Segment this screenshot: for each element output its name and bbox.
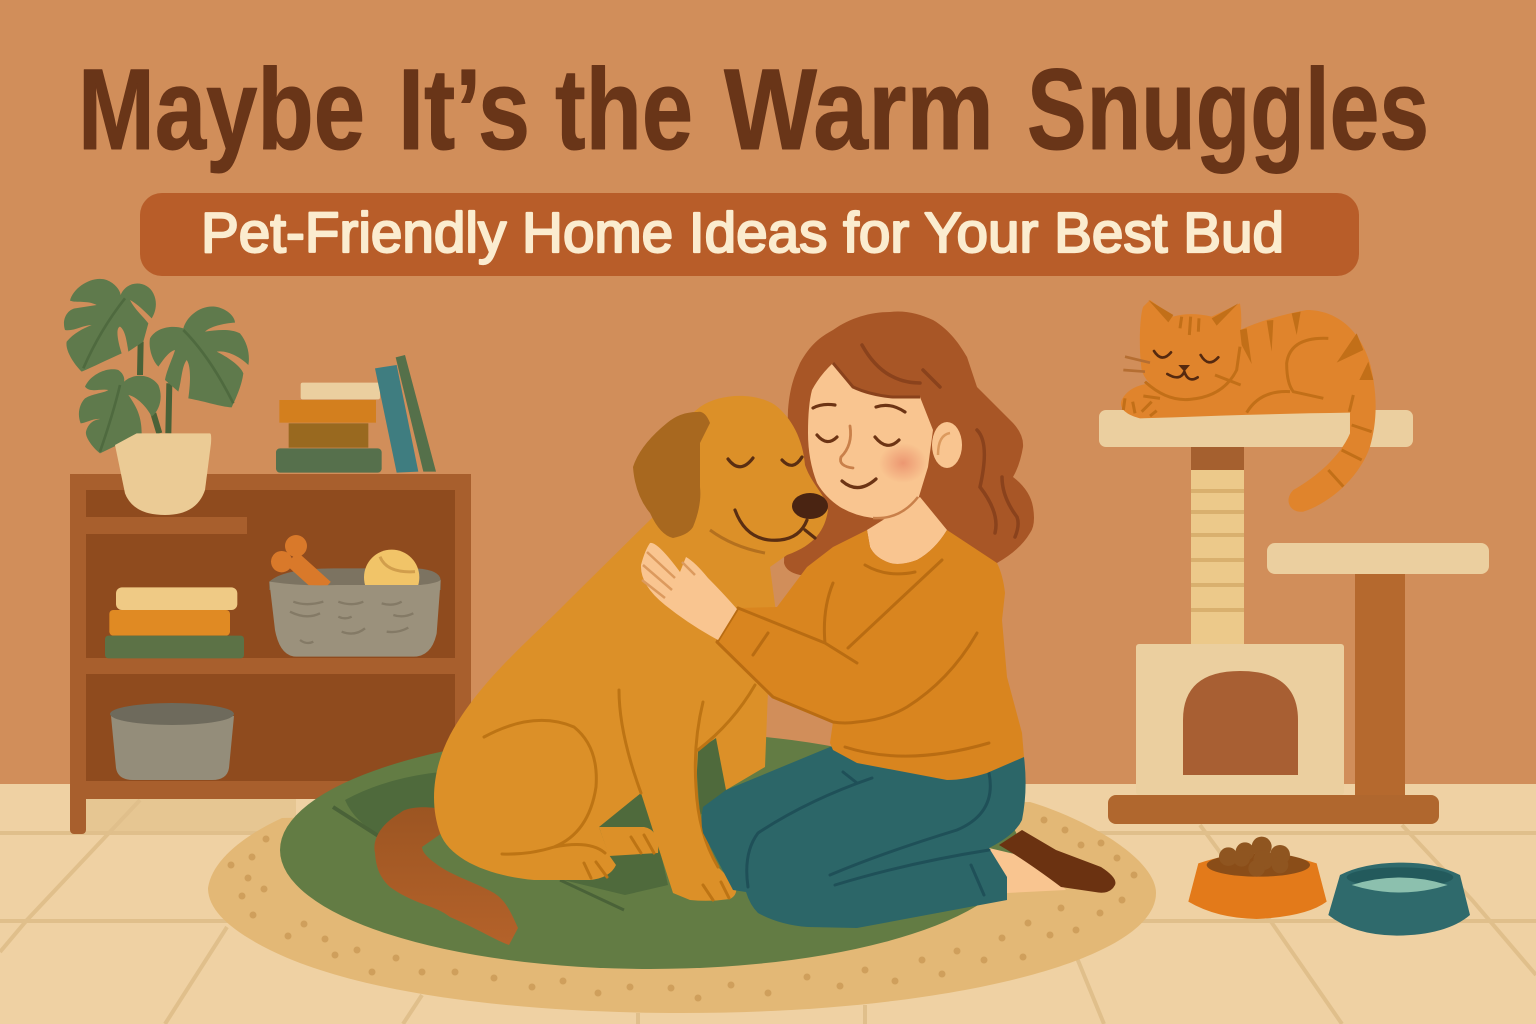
green pet bed (280, 731, 1020, 969)
orange cat (1121, 300, 1376, 512)
foot and slipper (989, 830, 1115, 893)
round rug (208, 802, 1156, 1013)
potted monstera plant (64, 279, 249, 515)
cat house (1136, 644, 1344, 795)
sweater (717, 530, 1024, 780)
side post (1355, 570, 1405, 795)
title: the (555, 46, 693, 174)
small platform (1267, 543, 1489, 574)
stacked books (276, 355, 436, 473)
scratching post (1191, 447, 1244, 644)
dog tail (374, 807, 518, 945)
title: It’s (398, 46, 530, 174)
title: Snuggles (1027, 46, 1429, 174)
ear (932, 422, 962, 468)
title: Warm (724, 46, 994, 174)
title: Maybe (78, 46, 365, 174)
jeans (702, 747, 1026, 928)
dog nose (792, 493, 828, 519)
shelf unit (70, 474, 471, 834)
dog ear (633, 412, 710, 538)
kibble bowl (1188, 837, 1327, 919)
subtitle banner (140, 193, 1359, 276)
shelf contents (105, 535, 441, 658)
dog body and head (434, 396, 828, 901)
face (808, 363, 933, 519)
subtitle banner: Pet-Friendly Home Ideas for Your Best Bud (201, 201, 1284, 265)
top platform (1099, 410, 1413, 447)
woman head and hair (784, 311, 1034, 575)
dog (434, 396, 828, 901)
hand (641, 543, 737, 640)
neck (867, 497, 947, 564)
tiled floor (0, 784, 1536, 1024)
cat tree (1099, 410, 1489, 824)
water bowl (1328, 863, 1470, 936)
bowl on lower shelf (110, 703, 234, 780)
woman body (641, 530, 1115, 928)
title (78, 46, 1429, 174)
wall background (0, 0, 1536, 784)
hair (784, 311, 1034, 575)
dog back paw (599, 827, 658, 856)
base board (1108, 795, 1439, 824)
